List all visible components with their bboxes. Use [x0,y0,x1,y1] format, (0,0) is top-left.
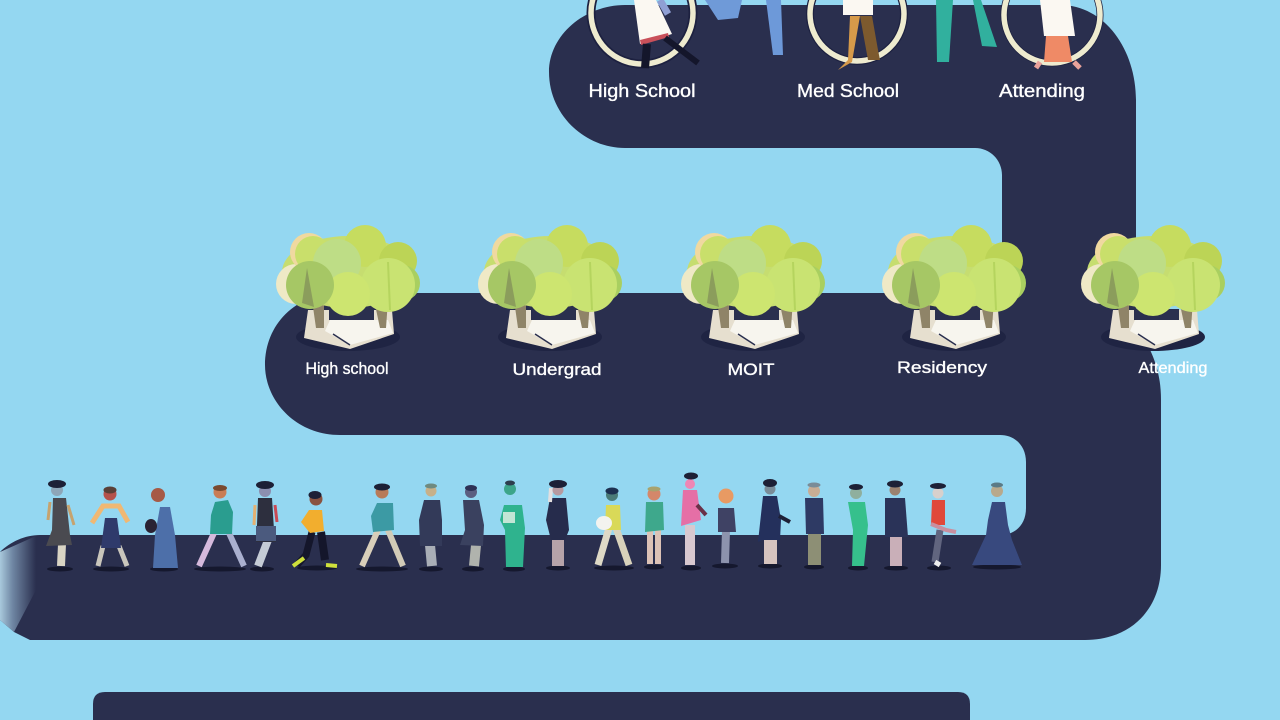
person 20 [927,483,956,570]
tree: residency [882,225,1026,351]
person 8 [419,484,443,572]
label: MOIT: MOIT [728,360,774,379]
label: residency: Residency [897,358,988,377]
middle row: trees and labels [276,225,1225,379]
teal figure legs [936,0,997,62]
person 16 [758,479,790,568]
label: high school: High school [306,359,388,378]
label: med school: Med School [797,81,899,101]
person 9 [460,485,484,572]
person 3 [145,488,178,572]
person 10 [500,480,525,572]
ring figure: high school [591,0,698,68]
bottom bar [93,692,970,720]
label: high school: High School [588,81,696,101]
person 1 [46,480,74,572]
road start fade [0,536,36,632]
person 5 [250,481,277,572]
person 19 [884,480,908,570]
person 6 [293,491,337,570]
label: attending: Attending [999,81,1085,101]
person 12 [594,488,634,570]
person 18 [848,484,868,570]
ring figure: med school [810,0,904,70]
tree: attending [1081,225,1225,351]
ring figure: attending [1004,0,1100,68]
top row: figures in rings [588,0,1100,101]
person 13 [644,486,664,570]
label: attending: Attending [1138,360,1208,377]
person 7 [356,484,408,572]
bottom row: walking people [46,472,1022,572]
person 14 [681,472,706,570]
tree: MOIT [681,225,825,351]
person 11 [546,480,570,570]
tree: undergrad [478,225,622,351]
blue figure legs [705,0,783,55]
person 17 [804,482,824,570]
winding road [0,5,1161,640]
label: undergrad: Undergrad [512,360,602,379]
person 21 [972,482,1022,570]
person 15 [712,488,738,568]
person 4 [194,485,246,572]
person 2 [92,486,129,572]
tree: high school [276,225,420,351]
